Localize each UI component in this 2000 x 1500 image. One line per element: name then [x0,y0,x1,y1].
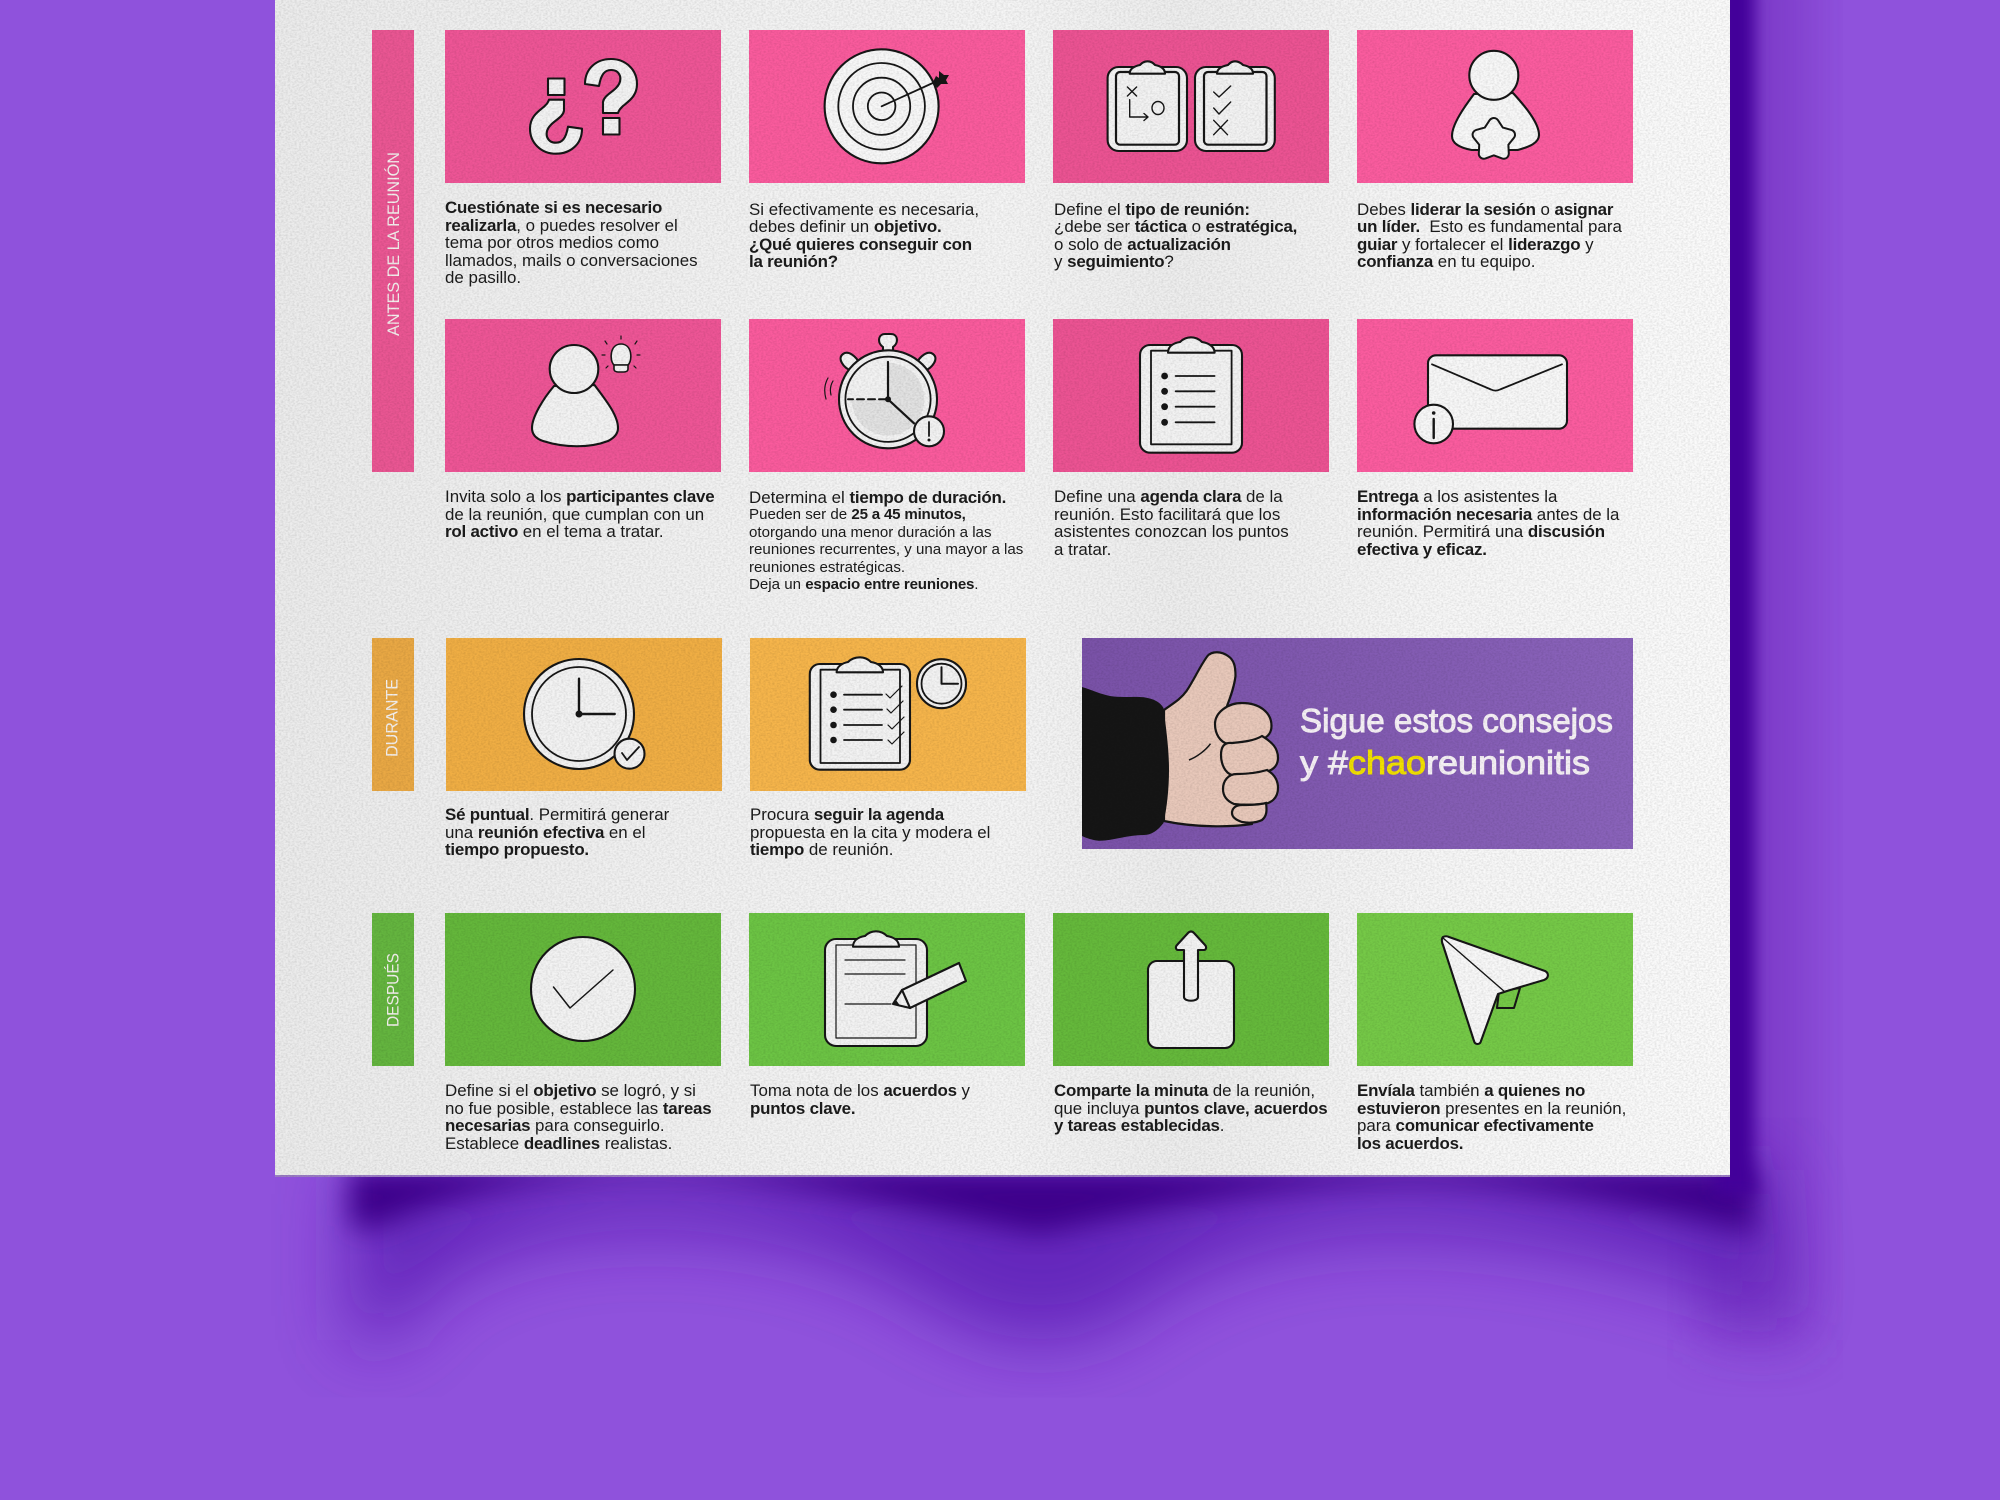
text: seguir la agenda: tiempo de reunión. [750,840,893,859]
text: tiempo de duración: reuniones estratégicas. [749,559,905,576]
icon: target with arrow [825,49,949,163]
text: cuestiónate: llamados, mails o conversaciones [445,251,698,270]
icon: envelope with info badge [1414,355,1567,443]
icon: check circle [531,937,635,1041]
card: seguir la agenda [750,638,1026,859]
text: tipo de reunión: y seguimiento? [1054,252,1174,271]
text: acuerdos: Toma nota de los acuerdos y [750,1081,970,1100]
text: cuestiónate: de pasillo. [445,268,521,287]
tile: envelope [1357,319,1633,472]
icon: clock with check [524,659,644,769]
card: participantes [445,319,721,541]
text: objetivo logrado: no fue posible, establece las tareas [445,1099,711,1118]
slogan text [1300,703,1613,782]
text: seguir la agenda: propuesta en la cita y modera el [750,823,990,842]
icon: upload box with arrow [1148,932,1234,1048]
text: información necesaria: efectiva y eficaz. [1357,540,1487,559]
tile: paper plane [1357,913,1633,1066]
text: cuestiónate: Cuestiónate si es necesario [445,198,662,217]
card: tiempo de duración [749,319,1025,593]
text: tiempo de duración [749,488,1023,593]
icon: tactical clipboard [1108,61,1187,151]
tile: clock [446,638,722,791]
card: agenda clara [1053,319,1329,559]
text: agenda clara: a tratar. [1054,540,1111,559]
illustration: thumbs up hand [1082,652,1278,841]
text: tiempo de duración: Pueden ser de 25 a 45 minutos, [749,506,966,523]
text: tiempo de duración: otorgando una menor duración a las [749,524,992,541]
section label: antes de la reunión [372,30,414,472]
text: objetivo logrado: Establece deadlines realistas. [445,1134,672,1153]
text: agenda clara: reunión. Esto facilitará que los [1054,505,1280,524]
text: minuta [1054,1082,1328,1135]
icon: agenda clipboard [1140,337,1242,453]
tile: agenda and clock [750,638,1026,791]
text: objetivo: ¿Qué quieres conseguir con [749,235,972,254]
card: tipo de reunión [1053,30,1329,271]
icon: person holding star [1452,51,1539,154]
text: información necesaria: información necesaria antes de la [1357,505,1619,524]
text: liderar: Debes liderar la sesión o asignar [1357,200,1613,218]
text: tipo de reunión: Define el tipo de reunión: [1054,200,1250,218]
text: objetivo: debes definir un objetivo. [749,217,942,236]
tile: leader [1357,30,1633,183]
card: objetivo logrado [445,913,721,1153]
paper sheet [275,0,1730,1177]
slogan text: Sigue estos consejos [1300,703,1613,740]
text: liderar: un líder. Esto es fundamental para [1357,217,1622,236]
text: objetivo [749,200,979,271]
text: seguir la agenda: Procura seguir la agenda [750,805,944,824]
text: participantes: Invita solo a los participantes clave [445,487,714,506]
icon: clipboard with pencil [825,931,966,1046]
tile: notes [749,913,1025,1066]
text: objetivo logrado: Define si el objetivo se logró, y si [445,1081,696,1100]
icon: person with light bulb [532,336,640,446]
tile: stopwatch [749,319,1025,472]
text: seguir la agenda [750,805,990,859]
section label: después [372,913,414,1066]
text: objetivo: Si efectivamente es necesaria, [749,200,979,218]
text: tiempo de duración: reuniones recurrentes, y una mayor a las [749,541,1023,558]
text: cuestiónate: tema por otros medios como [445,233,659,252]
text: cuestiónate: realizarla, o puedes resolver el [445,216,678,235]
text: liderar: guiar y fortalecer el liderazgo y [1357,235,1594,254]
card: enviar [1357,913,1633,1173]
slogan text: y #chaoreunionitis [1300,745,1590,782]
card: minuta [1053,913,1329,1173]
icon: paper plane [1442,936,1548,1044]
card: objetivo [749,30,1025,271]
text: información necesaria: Entrega a los asistentes la [1357,487,1557,506]
text: enviar [1357,1082,1626,1152]
text: puntual: tiempo propuesto. [445,840,589,859]
text: acuerdos [750,1082,970,1117]
icon: stopwatch with alert [825,334,944,448]
text: tiempo de duración: Deja un espacio entre reuniones. [749,576,978,593]
text: tiempo de duración: Determina el tiempo de duración. [749,488,1006,506]
text: enviar: para comunicar efectivamente [1357,1116,1594,1135]
card: liderar [1357,30,1633,271]
section label: durante: DURANTE [384,679,402,757]
section label: después: DESPUÉS [384,953,402,1027]
tile: clipboards [1053,30,1329,183]
text: cuestiónate [445,198,698,287]
text: agenda clara: Define una agenda clara de la [1054,487,1283,506]
tile: target [749,30,1025,183]
text: tipo de reunión [1054,200,1297,271]
banner: sigue estos consejos [1082,638,1633,849]
text: objetivo: la reunión? [749,252,838,271]
tile: share [1053,913,1329,1066]
icon: question marks [530,59,637,154]
tile: question marks [445,30,721,183]
text: participantes: rol activo en el tema a tratar. [445,522,664,541]
text: minuta: que incluya puntos clave, acuerdos [1054,1099,1328,1118]
text: objetivo logrado: necesarias para conseguirlo. [445,1116,665,1135]
text: liderar [1357,200,1622,271]
text: puntual: Sé puntual. Permitirá generar [445,805,669,824]
tile: person with idea [445,319,721,472]
text: minuta: Comparte la minuta de la reunión, [1054,1081,1315,1100]
text: información necesaria [1357,487,1620,559]
tile: check [445,913,721,1066]
card: puntual [445,638,722,859]
text: enviar: Envíala también a quienes no [1357,1081,1585,1100]
text: enviar: estuvieron presentes en la reunión, [1357,1099,1626,1118]
text: agenda clara: asistentes conozcan los puntos [1054,522,1289,541]
text: puntual: una reunión efectiva en el [445,823,646,842]
text: minuta: y tareas establecidas. [1054,1116,1224,1135]
text: tipo de reunión: o solo de actualización [1054,235,1231,254]
text: enviar: los acuerdos. [1357,1134,1463,1153]
text: tipo de reunión: ¿debe ser táctica o estratégica, [1054,217,1297,236]
section label: durante [372,638,414,791]
card: cuestiónate [445,30,721,287]
tile: agenda clipboard [1053,319,1329,472]
card: acuerdos [749,913,1025,1118]
text: agenda clara [1054,487,1289,559]
text: participantes: de la reunión, que cumplan con un [445,505,704,524]
text: puntual [445,805,669,859]
text: participantes [445,487,714,541]
section label: antes de la reunión: ANTES DE LA REUNIÓN [384,152,403,336]
card: información necesaria [1357,319,1633,559]
icon: agenda with checks and clock [810,657,966,770]
text: objetivo logrado [445,1081,711,1153]
text: información necesaria: reunión. Permitirá una discusión [1357,522,1605,541]
text: acuerdos: puntos clave. [750,1099,855,1118]
text: liderar: confianza en tu equipo. [1357,252,1535,271]
icon: strategic clipboard [1195,61,1275,151]
